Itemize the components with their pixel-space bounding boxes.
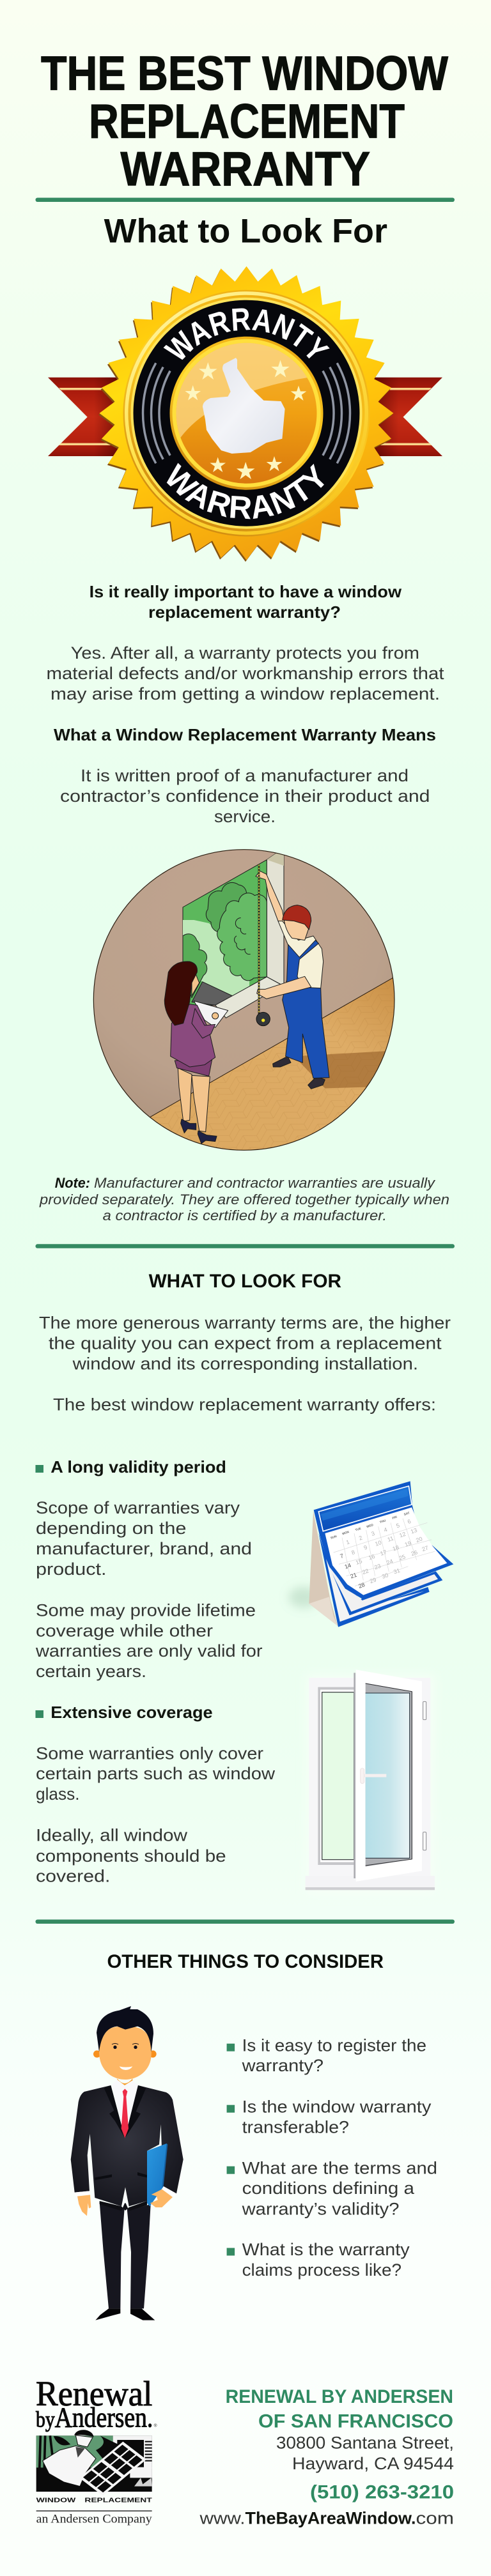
note: Note:	[55, 1175, 90, 1191]
intro answer	[46, 643, 444, 703]
stars	[185, 360, 306, 479]
measuring tape	[256, 864, 270, 1026]
calendar dates: 12	[398, 1531, 407, 1539]
contact details: (510) 263-3210	[310, 2482, 454, 2503]
calendar dates: 26	[410, 1549, 418, 1557]
note: a contractor is certified by a manufacturer.	[103, 1208, 387, 1223]
item: extensive coverage: components should be	[36, 1846, 226, 1866]
calendar dates: 25	[398, 1553, 406, 1561]
item: extensive coverage: certain parts such as window	[36, 1764, 276, 1783]
intro question	[90, 582, 402, 622]
logo wordmark: Renewal	[36, 2374, 152, 2413]
calendar dates: 14	[344, 1562, 352, 1570]
calendar dates: 16	[368, 1553, 376, 1561]
calendar dates: 27	[421, 1544, 429, 1552]
intro answer: material defects and/or workmanship errors that	[46, 664, 444, 683]
note: provided separately. They are offered together typically when	[39, 1192, 449, 1208]
heading: what a warranty means: What a Window Replacement Warranty Means	[54, 725, 436, 744]
calendar dates: 1	[345, 1538, 350, 1545]
icon: calendar	[289, 1481, 453, 1627]
window opening	[183, 854, 284, 1018]
item: long validity period: A long validity period	[51, 1457, 226, 1476]
calendar dates: WED	[366, 1523, 374, 1528]
intro question: replacement warranty?	[148, 602, 341, 622]
item: extensive coverage: Ideally, all window	[36, 1826, 188, 1845]
heading: other things to consider: OTHER THINGS TO CONSIDER	[107, 1951, 384, 1972]
logo tagline: WINDOW	[36, 2497, 76, 2504]
checklist: Is the window warranty	[242, 2097, 432, 2117]
badge text bottom: WARRANTY	[166, 463, 324, 519]
what to look for intro: The best window replacement warranty offers:	[53, 1395, 436, 1414]
logo: Renewal by Andersen	[36, 2374, 157, 2526]
warranty meaning text	[60, 766, 430, 826]
calendar dates: 24	[386, 1558, 394, 1566]
icon: thumbs up	[203, 358, 285, 454]
what to look for intro: the quality you can expect from a replacement	[49, 1334, 442, 1353]
warranty meaning text: service.	[214, 807, 276, 826]
contact details	[199, 2386, 454, 2528]
calendar dates: 13	[410, 1527, 418, 1535]
checklist: warranty?	[242, 2056, 323, 2075]
calendar dates: 11	[387, 1535, 394, 1543]
calendar dates: 5	[395, 1522, 400, 1529]
what to look for intro: The more generous warranty terms are, the higher	[39, 1314, 451, 1333]
subtitle: What to Look For	[104, 212, 387, 250]
client	[164, 962, 228, 1144]
calendar dates: 31	[393, 1567, 401, 1575]
contact details: TheBayAreaWindow.	[246, 2509, 416, 2528]
title: THE BEST WINDOW	[41, 47, 448, 100]
calendar dates: 8	[350, 1549, 355, 1556]
calendar dates	[330, 1511, 429, 1590]
logo picture	[36, 2430, 152, 2496]
calendar dates: THU	[379, 1519, 386, 1524]
calendar dates: FRI	[392, 1515, 398, 1520]
item: extensive coverage: covered.	[36, 1867, 110, 1886]
heading: what to look for: WHAT TO LOOK FOR	[149, 1271, 341, 1292]
calendar dates: 28	[357, 1581, 366, 1590]
title	[41, 47, 448, 195]
what to look for intro	[39, 1314, 451, 1414]
checklist: What are the terms and	[242, 2159, 437, 2178]
item: long validity period: warranties are only valid for	[35, 1641, 263, 1660]
warranty meaning text: contractor’s confidence in their product and	[60, 786, 430, 806]
calendar dates: TUE	[355, 1527, 361, 1531]
calendar dates: 4	[383, 1526, 388, 1533]
calendar dates: 9	[363, 1544, 368, 1551]
title: REPLACEMENT	[89, 95, 405, 148]
intro answer: Yes. After all, a warranty protects you from	[71, 643, 419, 663]
calendar dates: 19	[404, 1540, 412, 1548]
contact details: RENEWAL BY ANDERSEN	[226, 2386, 453, 2407]
calendar dates: 20	[415, 1535, 423, 1544]
left ribbon	[48, 378, 125, 456]
item: long validity period: product.	[36, 1560, 106, 1579]
title: WARRANTY	[120, 142, 370, 195]
contact details: OF SAN FRANCISCO	[258, 2411, 453, 2432]
item: extensive coverage	[36, 1703, 276, 1886]
item: extensive coverage: Extensive coverage	[51, 1703, 213, 1722]
intro question: Is it really important to have a window	[90, 582, 402, 601]
calendar dates: 17	[379, 1549, 387, 1557]
checklist: Is it easy to register the	[242, 2036, 426, 2055]
contact details: com	[416, 2509, 454, 2528]
calendar dates: 10	[374, 1539, 382, 1547]
logo tagline: REPLACEMENT	[84, 2497, 153, 2504]
ring stripes	[143, 363, 350, 463]
what to look for intro: window and its corresponding installation.	[72, 1354, 418, 1374]
logo tagline	[36, 2497, 153, 2526]
contact details: www.	[199, 2509, 246, 2528]
contact details: 30800 Santana Street,	[276, 2433, 454, 2452]
calendar dates: 30	[381, 1572, 389, 1580]
right ribbon	[370, 378, 442, 456]
contractor	[256, 871, 329, 1089]
black ring	[133, 300, 359, 526]
calendar dates: 23	[373, 1563, 382, 1571]
calendar dates: 6	[407, 1518, 412, 1525]
calendar dates: 7	[339, 1552, 345, 1560]
gold starburst	[98, 265, 395, 562]
checklist	[227, 2036, 437, 2280]
item: long validity period: Scope of warranties vary	[36, 1498, 240, 1517]
warranty meaning text: It is written proof of a manufacturer and	[81, 766, 409, 785]
logo wordmark: ®	[154, 2423, 157, 2428]
illustration: contractor measuring window with client	[93, 850, 396, 1153]
calendar dates: SUN	[330, 1535, 338, 1540]
contact details: Hayward, CA 94544	[292, 2454, 454, 2473]
checklist: claims process like?	[242, 2260, 401, 2280]
item: extensive coverage: glass.	[36, 1784, 79, 1804]
item: long validity period: coverage while other	[36, 1621, 213, 1641]
calendar dates: 18	[392, 1544, 400, 1552]
checklist: transferable?	[242, 2117, 349, 2136]
checklist: warranty’s validity?	[241, 2199, 399, 2218]
logo tagline: an Andersen Company	[36, 2512, 152, 2526]
calendar dates: 15	[355, 1558, 363, 1566]
icon: open window	[306, 1669, 435, 1894]
calendar dates: 29	[369, 1576, 377, 1584]
item: long validity period	[35, 1457, 263, 1681]
item: extensive coverage: Some warranties only cover	[36, 1744, 263, 1763]
checklist: What is the warranty	[242, 2240, 410, 2259]
floor	[150, 976, 396, 1153]
item: long validity period: Some may provide lifetime	[36, 1601, 256, 1620]
badge text top: WARRANTY	[164, 308, 330, 360]
calendar dates: SAT	[403, 1511, 410, 1516]
calendar dates: 22	[361, 1567, 370, 1575]
item: long validity period: certain years.	[36, 1662, 146, 1681]
logo wordmark: byAndersen.	[36, 2402, 153, 2433]
calendar dates: 21	[350, 1572, 357, 1580]
item: long validity period: manufacturer, brand, and	[36, 1539, 252, 1558]
figure: businessman with folder	[71, 2006, 183, 2320]
calendar dates: 3	[370, 1530, 375, 1537]
note: Manufacturer and contractor warranties are usually	[94, 1175, 436, 1191]
item: long validity period: depending on the	[36, 1519, 186, 1538]
calendar dates: MON	[342, 1530, 350, 1535]
checklist: conditions defining a	[242, 2179, 414, 2198]
logo wordmark	[36, 2374, 157, 2433]
warranty badge	[48, 266, 442, 562]
calendar dates: 2	[358, 1535, 363, 1542]
intro answer: may arise from getting a window replacement.	[51, 684, 440, 703]
